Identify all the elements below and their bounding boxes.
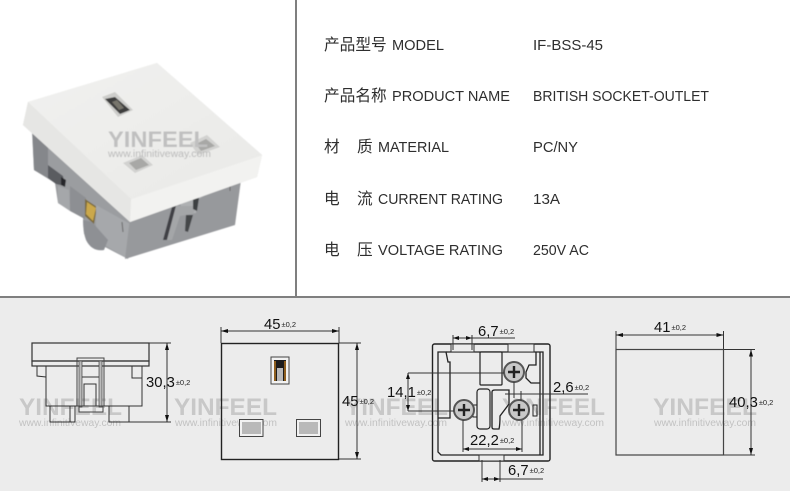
row: current rating: 13A [533, 192, 560, 208]
front view drawing [221, 317, 374, 460]
row: voltage rating: VOLTAGE RATING [378, 243, 503, 259]
row: voltage rating: 电 [324, 241, 340, 259]
watermarks over drawings: YINFEEL [653, 394, 757, 421]
screw right [509, 400, 529, 420]
dimension: 22,2 [463, 420, 522, 452]
row: material [324, 138, 578, 156]
dimension: 30,3: ±0,2 [176, 378, 190, 387]
row: model [324, 36, 603, 54]
dimension: 2,6: ±0,2 [575, 383, 589, 392]
photo watermark: www.infinitiveway.com [107, 149, 211, 160]
dimension: 14,1: ±0,2 [417, 388, 431, 397]
dimension: 22,2: ±0,2 [500, 436, 514, 445]
row: product name: PRODUCT NAME [392, 89, 510, 105]
dimension: 30,3 [129, 343, 190, 422]
panel: drawings strip [0, 298, 790, 491]
row: material: 材 [324, 138, 340, 156]
dimension: 6,7 top: 6,7 [478, 324, 499, 340]
row: voltage rating: 压 [357, 242, 373, 259]
dimension: 14,1: 14,1 [387, 385, 416, 401]
watermarks over drawings: www.infinitiveway.com [501, 418, 604, 429]
row: current rating [324, 190, 560, 208]
socket neutral slot [123, 155, 153, 173]
dimension: 41: ±0,2 [671, 323, 686, 332]
row: current rating: 电 [324, 190, 340, 208]
watermarks over drawings: YINFEEL [19, 394, 122, 421]
panel divider horizontal [0, 296, 790, 298]
rear clips [451, 344, 534, 461]
dimension: 40,3: ±0,2 [759, 398, 773, 407]
panel divider vertical [295, 0, 297, 298]
watermarks over drawings: YINFEEL [174, 394, 277, 421]
row: product name [324, 87, 709, 105]
watermarks over drawings: www.infinitiveway.com [18, 418, 121, 429]
dimension: 40,3: 40,3 [729, 395, 758, 411]
dimension: height 45: ±0,2 [359, 397, 374, 406]
row: voltage rating [324, 241, 589, 259]
row: material: MATERIAL [378, 140, 449, 156]
rear inner structure [438, 352, 543, 455]
row: current rating: CURRENT RATING [378, 192, 503, 208]
row: material: PC/NY [533, 140, 578, 156]
dimension: width 45 [221, 317, 339, 343]
dimension: height 45: 45 [342, 394, 358, 410]
row: model: IF-BSS-45 [533, 38, 603, 54]
earth slot [271, 357, 289, 384]
socket live slot [190, 135, 220, 155]
dimension: 6,7 top [453, 324, 515, 350]
front face outline [222, 344, 338, 460]
side view drawing [32, 343, 190, 422]
live slot [240, 420, 263, 436]
neutral slot [296, 420, 320, 436]
row: product name: 产品名称 [324, 87, 387, 105]
screw top right [504, 362, 524, 382]
row: model: 产品型号 [324, 36, 387, 54]
side view outline [32, 343, 149, 422]
row: product name: BRITISH SOCKET-OUTLET [533, 89, 709, 105]
bottom view square [616, 350, 724, 455]
watermarks over drawings [18, 394, 757, 429]
watermarks over drawings: YINFEEL [345, 394, 448, 421]
row: model: MODEL [392, 38, 444, 54]
dimension: 6,7 bottom [482, 460, 544, 482]
dimension: 6,7 bottom: 6,7 [508, 463, 529, 479]
dimension: 41: 41 [654, 320, 670, 336]
photo watermark: YINFEEL [108, 127, 208, 152]
rear outer frame [432, 344, 550, 461]
socket right side of grey body [125, 180, 241, 259]
dimension: 2,6 [505, 380, 589, 401]
dimension: width 45: ±0,2 [281, 320, 296, 329]
dimension: 40,3 [724, 350, 773, 455]
bottom view drawing [616, 320, 773, 455]
dimension: width 45: 45 [264, 317, 280, 333]
dimension: 14,1 [387, 373, 504, 411]
socket left side of grey body [32, 125, 134, 259]
dimension: 22,2: 22,2 [470, 433, 499, 449]
dimension: height 45 [339, 343, 374, 459]
socket earth slot [102, 92, 133, 117]
product photo: socket module [23, 63, 262, 259]
watermarks over drawings: YINFEEL [502, 394, 605, 421]
row: voltage rating: 250V AC [533, 243, 589, 259]
screw left [454, 400, 474, 420]
rear view drawing [387, 324, 589, 482]
photo watermark [107, 127, 211, 160]
spec table [324, 36, 709, 259]
dimension: 2,6: 2,6 [553, 380, 574, 396]
row: current rating: 流 [357, 190, 373, 208]
dimension: 6,7 top: ±0,2 [500, 327, 514, 336]
dimension: 30,3: 30,3 [146, 375, 175, 391]
watermarks over drawings: www.infinitiveway.com [174, 418, 277, 429]
dimension: 6,7 bottom: ±0,2 [530, 466, 544, 475]
watermarks over drawings: www.infinitiveway.com [344, 418, 447, 429]
watermarks over drawings: www.infinitiveway.com [653, 418, 756, 429]
row: material: 质 [357, 138, 373, 156]
socket white faceplate [23, 63, 262, 222]
dimension: 41 [616, 320, 724, 349]
